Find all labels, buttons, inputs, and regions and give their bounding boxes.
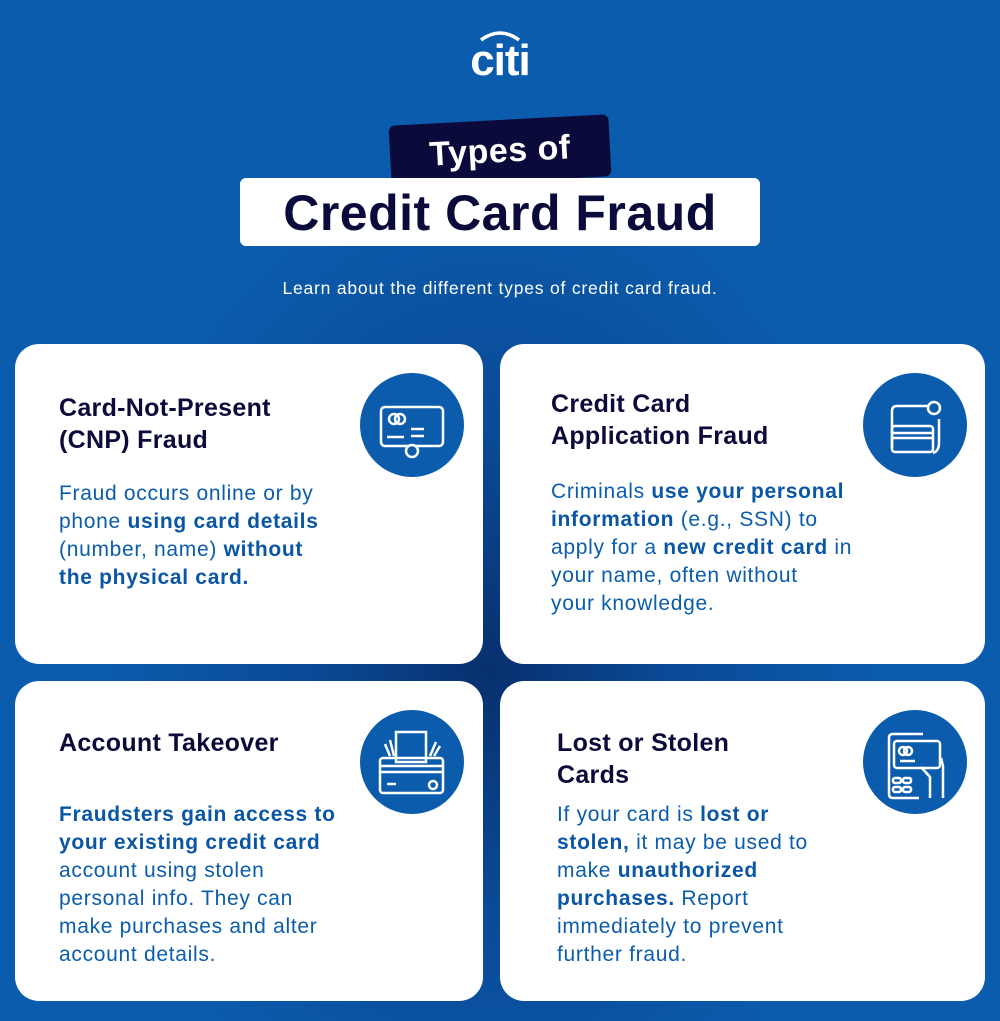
text: account details. — [59, 943, 216, 966]
text: make unauthorized — [557, 859, 758, 882]
icon: card with money — [360, 710, 464, 814]
text: information (e.g., SSN) to — [551, 508, 818, 531]
text: account using stolen — [59, 859, 264, 882]
text: phone using card details — [59, 510, 319, 533]
text: Fraudsters gain access to — [59, 803, 336, 826]
heading: Application Fraud — [551, 422, 769, 450]
text: personal info. They can — [59, 887, 293, 910]
heading — [557, 729, 729, 789]
text: make purchases and alter — [59, 915, 317, 938]
heading: Cards — [557, 761, 629, 789]
heading: Card-Not-Present — [59, 394, 271, 422]
text: (number, name) without — [59, 538, 303, 561]
panel: account takeover — [15, 681, 483, 1001]
text: further fraud. — [557, 943, 687, 966]
text: your knowledge. — [551, 592, 714, 615]
heading — [551, 390, 769, 450]
panel: application fraud — [500, 344, 985, 664]
icon: card with x — [360, 373, 464, 477]
text: purchases. Report — [557, 887, 749, 910]
icon: terminal with hand — [863, 710, 967, 814]
title tag: Types of: Types of — [428, 128, 572, 174]
heading: Lost or Stolen — [557, 729, 729, 757]
subtitle: Learn about the different types of credit card fraud. — [282, 278, 718, 298]
text: the physical card. — [59, 566, 249, 589]
panel: CNP fraud — [15, 344, 483, 664]
text — [59, 803, 336, 966]
text: If your card is lost or — [557, 803, 769, 826]
text — [59, 482, 319, 589]
text: immediately to prevent — [557, 915, 784, 938]
text: apply for a new credit card in — [551, 536, 852, 559]
text — [551, 480, 852, 615]
text: your existing credit card — [59, 831, 320, 854]
title tag: Types of — [389, 114, 611, 188]
text: Fraud occurs online or by — [59, 482, 313, 505]
text: Criminals use your personal — [551, 480, 844, 503]
heading: Credit Card — [551, 390, 690, 418]
text: stolen, it may be used to — [557, 831, 808, 854]
text — [557, 803, 808, 966]
title: Credit Card Fraud — [240, 178, 760, 246]
heading — [59, 394, 271, 454]
text: your name, often without — [551, 564, 798, 587]
icon: card with clock — [863, 373, 967, 477]
panel: lost or stolen — [500, 681, 985, 1001]
heading: (CNP) Fraud — [59, 426, 208, 454]
heading: Account Takeover — [59, 729, 279, 757]
title: Credit Card Fraud: Credit Card Fraud — [283, 185, 717, 241]
